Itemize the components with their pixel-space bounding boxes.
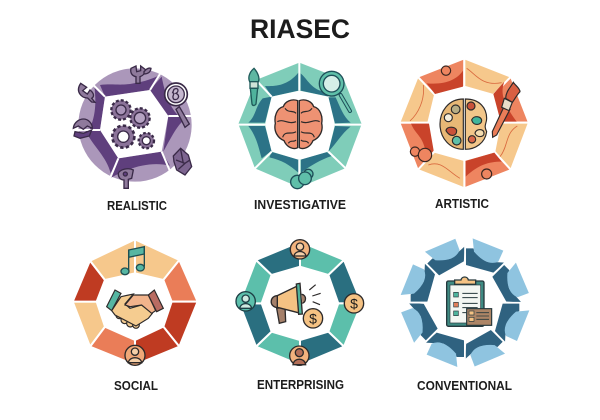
panel: enterprising <box>236 240 364 365</box>
icon: helmet <box>73 119 92 138</box>
investigative ring <box>237 62 363 188</box>
icon: wrench top <box>131 66 151 83</box>
icon: person left <box>236 292 255 311</box>
icon: circle top <box>441 66 451 75</box>
icon: coin centre: $ <box>309 310 317 326</box>
icon: person bottom <box>290 346 309 365</box>
icon: gears <box>111 100 154 148</box>
icon: tool bottom <box>118 169 133 188</box>
icon: magnifier <box>165 83 189 127</box>
panel: artistic <box>399 58 529 188</box>
label: artistic: ARTISTIC <box>435 196 490 211</box>
icon: megaphone <box>271 283 305 323</box>
enterprising ring <box>239 242 362 365</box>
panel: conventional <box>391 229 539 376</box>
title: RIASEC <box>250 14 350 44</box>
conventional ring <box>391 229 539 376</box>
icon: music note <box>121 247 144 275</box>
artistic ring <box>399 58 529 188</box>
label: enterprising: ENTERPRISING <box>257 377 344 392</box>
icon: coin right: $ <box>350 295 358 311</box>
icon: wrench left <box>79 83 95 102</box>
icon: cloud bottom <box>291 169 313 189</box>
icon: palette <box>440 99 487 149</box>
icon: rock <box>173 148 192 175</box>
label: investigative: INVESTIGATIVE <box>254 197 346 212</box>
icon: brush <box>492 82 520 137</box>
panel: social <box>73 239 198 365</box>
icon: blobs left <box>410 147 432 162</box>
panel: investigative <box>237 62 363 189</box>
icon: circle bottom <box>482 169 492 179</box>
label: conventional: CONVENTIONAL <box>417 378 512 393</box>
icon: small card <box>467 309 492 325</box>
icon: person <box>125 345 145 365</box>
label: realistic: REALISTIC <box>107 198 168 213</box>
panel: realistic <box>73 66 193 188</box>
social ring <box>73 239 198 365</box>
icon: clipboard <box>447 277 484 326</box>
icon: brain <box>275 100 322 148</box>
label: social: SOCIAL <box>114 378 158 393</box>
realistic ring <box>77 68 193 182</box>
icon: paintbrush <box>249 68 259 105</box>
icon: sound lines <box>309 285 321 305</box>
icon: handshake <box>107 290 163 328</box>
icon: person top <box>290 240 310 259</box>
icon: magnifying glass <box>319 71 350 111</box>
